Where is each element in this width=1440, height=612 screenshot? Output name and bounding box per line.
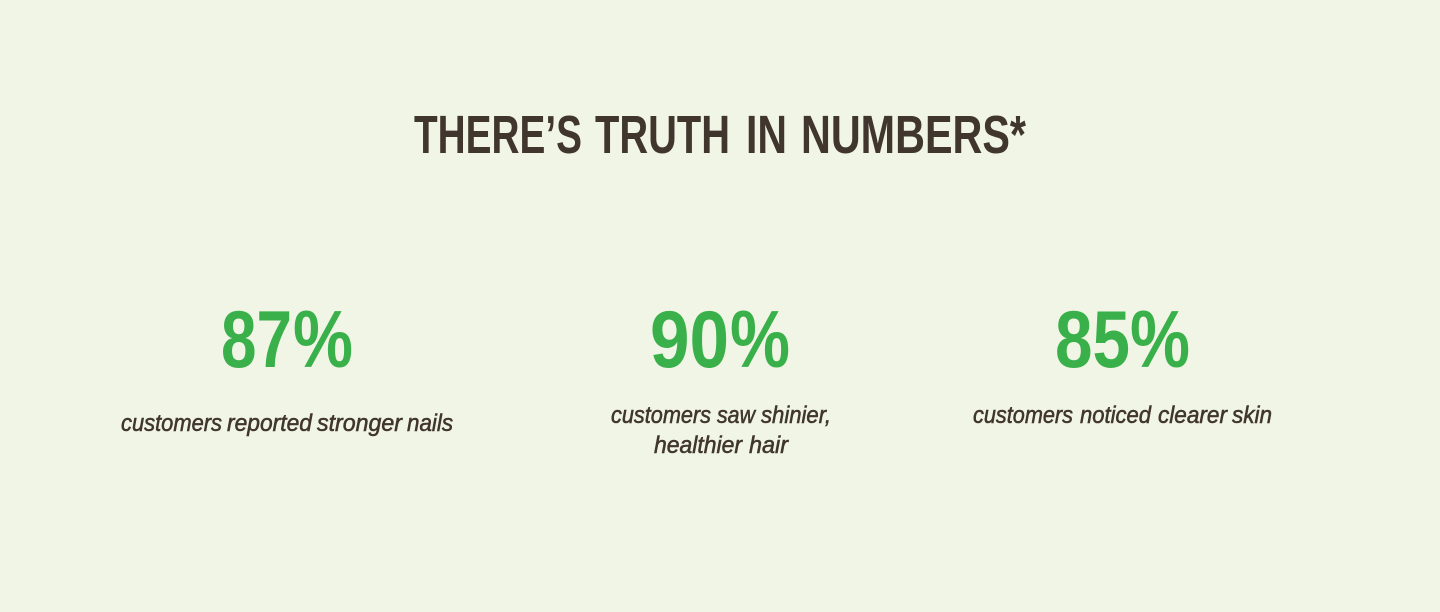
number: 87%: 87 (221, 295, 292, 385)
number: 90%: 90 (650, 295, 729, 385)
number: 90% (650, 295, 790, 385)
caption: clearer skin (973, 402, 1272, 429)
title: NUMBERS* (801, 105, 1026, 165)
caption: shinier hair: shinier, (761, 402, 831, 429)
caption: shinier hair: hair (749, 432, 789, 459)
number: 87%: % (293, 295, 353, 385)
number: 85% (1055, 295, 1190, 385)
caption: clearer skin: skin (1232, 402, 1272, 429)
number: 85%: % (1130, 295, 1190, 385)
stat: stronger nails (121, 295, 453, 437)
caption: clearer skin: customers (973, 402, 1073, 429)
number: 85%: 85 (1055, 295, 1130, 385)
title (414, 105, 1026, 165)
caption: shinier hair (611, 402, 831, 459)
caption: stronger nails: customers (121, 410, 222, 437)
number: 90%: % (730, 295, 790, 385)
number: 87% (221, 295, 353, 385)
stat: clearer skin (973, 295, 1272, 429)
caption: clearer skin: clearer (1158, 402, 1228, 429)
caption: shinier hair: healthier (654, 432, 743, 459)
title: THERE’S (414, 105, 582, 165)
caption: shinier hair: customers (611, 402, 711, 429)
caption: stronger nails: reported (227, 410, 313, 437)
title: IN (746, 105, 787, 165)
stat: shinier hair (611, 295, 831, 459)
caption: stronger nails: nails (407, 410, 453, 437)
caption: shinier hair: saw (717, 402, 756, 429)
caption: clearer skin: noticed (1080, 402, 1152, 429)
caption: stronger nails (121, 410, 453, 437)
caption: stronger nails: stronger (317, 410, 403, 437)
title: TRUTH (595, 105, 730, 165)
